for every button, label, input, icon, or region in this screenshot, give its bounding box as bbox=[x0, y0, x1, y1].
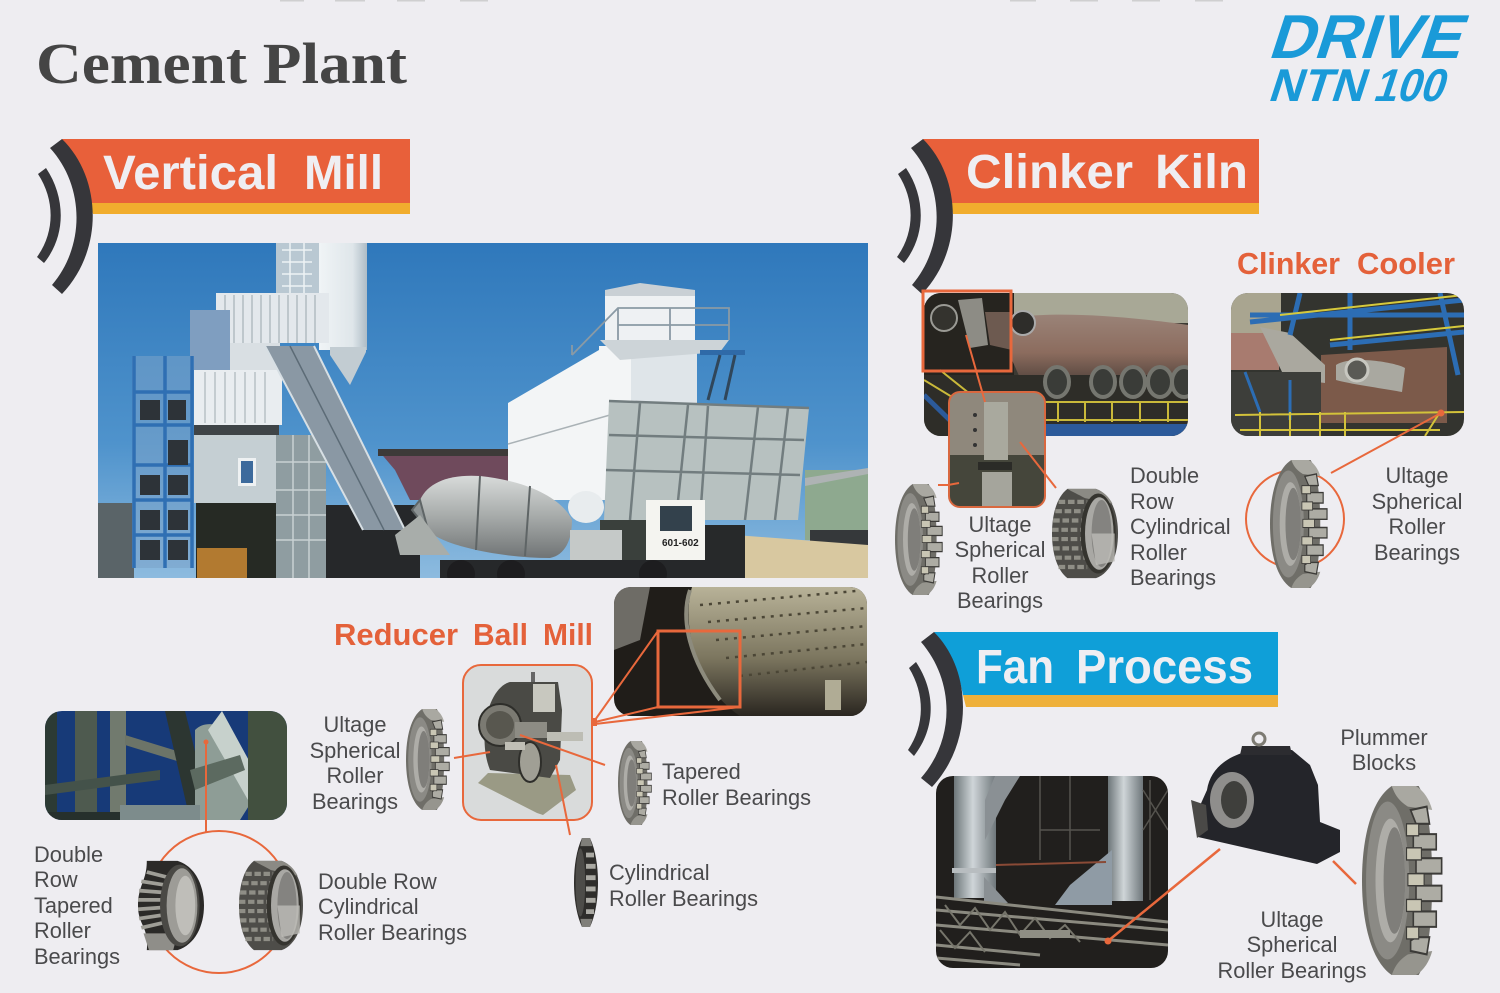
label: fan ultage spherical: Roller Bearings bbox=[1217, 958, 1367, 983]
label: cooler ultage spherical: Roller bbox=[1389, 514, 1445, 539]
label: kiln double row cylindrical: Cylindrical bbox=[1130, 514, 1231, 539]
connector lines: reducer bbox=[454, 735, 605, 835]
logo: Drive NTN 100 bbox=[1263, 2, 1477, 112]
connector and circle: clinker cooler bbox=[1246, 410, 1444, 568]
connector and circle: piping bbox=[148, 740, 290, 973]
sub-heading: Reducer Ball Mill: Ball bbox=[473, 617, 528, 652]
photo: vertical mill plant: 601-602 bbox=[662, 538, 699, 549]
label: double row tapered: Roller bbox=[34, 918, 91, 943]
bearing: kiln double row cylindrical bbox=[1052, 489, 1118, 578]
banner: Vertical Mill bbox=[37, 139, 410, 294]
bearing: cooler spherical bbox=[1270, 460, 1327, 588]
bearing: fan spherical bbox=[1362, 786, 1442, 975]
banner: Fan Process bbox=[908, 632, 1278, 787]
photo: fan process bbox=[936, 776, 1168, 968]
label: tapered roller bearings: Roller Bearings bbox=[662, 785, 811, 810]
title: Cement Plant bbox=[36, 31, 408, 96]
label: plummer blocks: Blocks bbox=[1352, 750, 1416, 775]
bearing: double row cylindrical bbox=[239, 861, 303, 950]
photo: vertical mill plant bbox=[98, 243, 868, 588]
bearing: reducer tapered bbox=[618, 741, 651, 825]
bearing: double row tapered bbox=[138, 861, 204, 950]
banner: Vertical Mill: Mill bbox=[304, 147, 383, 200]
banner: Fan Process: Process bbox=[1076, 641, 1253, 694]
logo: Drive NTN 100: NTN bbox=[1264, 60, 1376, 112]
bearing: kiln spherical bbox=[895, 484, 942, 595]
highlight box on kiln bbox=[923, 291, 1011, 371]
label: fan ultage spherical: Ultage bbox=[1260, 907, 1324, 932]
label: kiln ultage spherical: Ultage bbox=[968, 512, 1032, 537]
label: cooler ultage spherical: Bearings bbox=[1374, 540, 1460, 565]
label: tapered roller bearings: Tapered bbox=[662, 759, 741, 784]
label: kiln ultage spherical: Bearings bbox=[957, 588, 1043, 613]
label: reducer ultage spherical: Roller bbox=[327, 763, 383, 788]
reducer gearbox illustration bbox=[463, 665, 592, 820]
label: double row cylindrical: Cylindrical bbox=[318, 894, 419, 919]
label: double row cylindrical: Roller Bearings bbox=[318, 920, 467, 945]
label: fan ultage spherical: Spherical bbox=[1247, 932, 1337, 957]
banner: Clinker Kiln: Clinker bbox=[966, 146, 1133, 199]
connector: fan process bbox=[1104, 849, 1356, 944]
label: double row tapered: Double bbox=[34, 842, 103, 867]
logo: Drive NTN 100: 100 bbox=[1369, 60, 1455, 112]
label: reducer ultage spherical: Ultage bbox=[323, 712, 387, 737]
connector lines: kiln bbox=[938, 335, 1056, 488]
label: reducer ultage spherical: Bearings bbox=[312, 789, 398, 814]
sub-heading: Clinker Cooler: Clinker bbox=[1237, 246, 1340, 281]
banner: Clinker Kiln bbox=[897, 139, 1259, 294]
label: kiln double row cylindrical: Double bbox=[1130, 463, 1199, 488]
label: double row cylindrical: Double Row bbox=[318, 869, 437, 894]
label: kiln ultage spherical: Spherical bbox=[955, 537, 1045, 562]
label: cylindrical roller bearings: Cylindrical bbox=[609, 860, 710, 885]
bearing: reducer spherical bbox=[406, 709, 449, 810]
label: kiln double row cylindrical: Row bbox=[1130, 489, 1174, 514]
label: double row tapered: Bearings bbox=[34, 944, 120, 969]
photo: ball mill bbox=[614, 587, 867, 716]
label: cooler ultage spherical: Ultage bbox=[1385, 463, 1449, 488]
plummer block bbox=[1191, 733, 1340, 864]
logo: Drive NTN 100: DRIVE bbox=[1263, 2, 1477, 72]
label: cylindrical roller bearings: Roller Bearings bbox=[609, 886, 758, 911]
label: kiln ultage spherical: Roller bbox=[972, 563, 1028, 588]
sub-heading: Reducer Ball Mill: Reducer bbox=[334, 617, 458, 652]
bearing: reducer cylindrical bbox=[574, 838, 598, 927]
label: plummer blocks: Plummer bbox=[1340, 725, 1428, 750]
sub-heading: Reducer Ball Mill: Mill bbox=[543, 617, 593, 652]
label: kiln double row cylindrical: Bearings bbox=[1130, 565, 1216, 590]
label: cooler ultage spherical: Spherical bbox=[1372, 489, 1462, 514]
label: kiln double row cylindrical: Roller bbox=[1130, 540, 1187, 565]
photo: vertical mill piping bbox=[45, 711, 287, 820]
sub-heading: Clinker Cooler bbox=[1237, 246, 1455, 281]
highlight box and connectors: ball mill bbox=[591, 631, 740, 726]
sub-heading: Clinker Cooler: Cooler bbox=[1357, 246, 1455, 281]
banner: Vertical Mill: Vertical bbox=[103, 147, 278, 200]
label: double row tapered: Row bbox=[34, 867, 78, 892]
photo: clinker cooler bbox=[1231, 293, 1464, 436]
inset photo: kiln roller bbox=[949, 392, 1045, 507]
label: double row tapered: Tapered bbox=[34, 893, 113, 918]
photo: clinker kiln bbox=[924, 293, 1196, 436]
label: reducer ultage spherical: Spherical bbox=[310, 738, 400, 763]
sub-heading: Reducer Ball Mill bbox=[334, 617, 593, 652]
banner: Fan Process: Fan bbox=[976, 641, 1054, 694]
banner: Clinker Kiln: Kiln bbox=[1155, 146, 1248, 199]
